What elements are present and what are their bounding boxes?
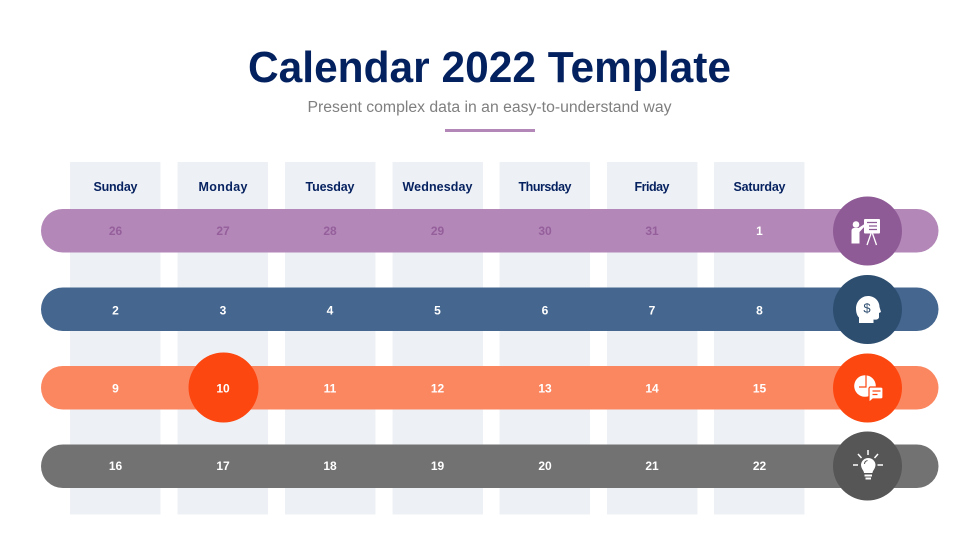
- weekday headings: Friday: [634, 180, 670, 194]
- weekday columns: [70, 162, 804, 514]
- week row 4: 21: [645, 459, 659, 473]
- week row 3: 15: [753, 382, 766, 396]
- title: Calendar 2022 Template: [248, 43, 731, 92]
- icon: light bulb: [833, 432, 902, 500]
- icon: presenter at board: [833, 196, 902, 266]
- week row 3: 13: [538, 382, 552, 396]
- week row 3: [41, 352, 938, 422]
- title underline: [445, 129, 535, 132]
- weekday headings: Saturday: [734, 180, 786, 194]
- week row 4: 19: [431, 459, 444, 473]
- week row 4: 20: [538, 459, 552, 473]
- week row 2: 8: [756, 304, 763, 318]
- week row 2: [41, 288, 938, 331]
- subtitle: Present complex data in an easy-to-understand way: [308, 99, 672, 116]
- icon: head with dollar: $: [863, 300, 871, 316]
- week row 3: 10: [216, 382, 230, 396]
- week row 3: 12: [431, 382, 444, 396]
- week row 2: 6: [542, 304, 549, 318]
- week row 1: 1: [756, 224, 763, 238]
- week row 1: 28: [323, 224, 337, 238]
- weekday headings: [94, 180, 786, 194]
- week row 1: 31: [645, 224, 659, 238]
- icon: clock and chat bubble: [833, 354, 902, 422]
- weekday headings: Sunday: [94, 180, 138, 194]
- week row 4: 16: [109, 459, 122, 473]
- week row 4: 18: [323, 459, 337, 473]
- week row 1: [41, 209, 938, 252]
- weekday headings: Thursday: [518, 180, 572, 194]
- week row 4: 22: [753, 459, 766, 473]
- week row 2: 3: [220, 304, 227, 318]
- week row 1: 27: [216, 224, 230, 238]
- weekday headings: Tuesday: [306, 180, 355, 194]
- week row 2: 4: [327, 304, 334, 318]
- week row 2: 5: [434, 304, 441, 318]
- week row 1: 26: [109, 224, 122, 238]
- week row 3: 14: [645, 382, 659, 396]
- week row 1: 29: [431, 224, 444, 238]
- week row 3: 11: [324, 382, 337, 396]
- icon: head with dollar: [833, 275, 902, 344]
- week row 4: 17: [216, 459, 230, 473]
- week row 2: 2: [112, 304, 119, 318]
- week row 4: [41, 444, 938, 488]
- weekday headings: Wednesday: [402, 180, 473, 194]
- week row 1: 30: [538, 224, 552, 238]
- week row 2: 7: [649, 304, 656, 318]
- weekday headings: Monday: [198, 180, 248, 194]
- highlighted date circle: [188, 352, 258, 422]
- week row 3: 9: [112, 382, 119, 396]
